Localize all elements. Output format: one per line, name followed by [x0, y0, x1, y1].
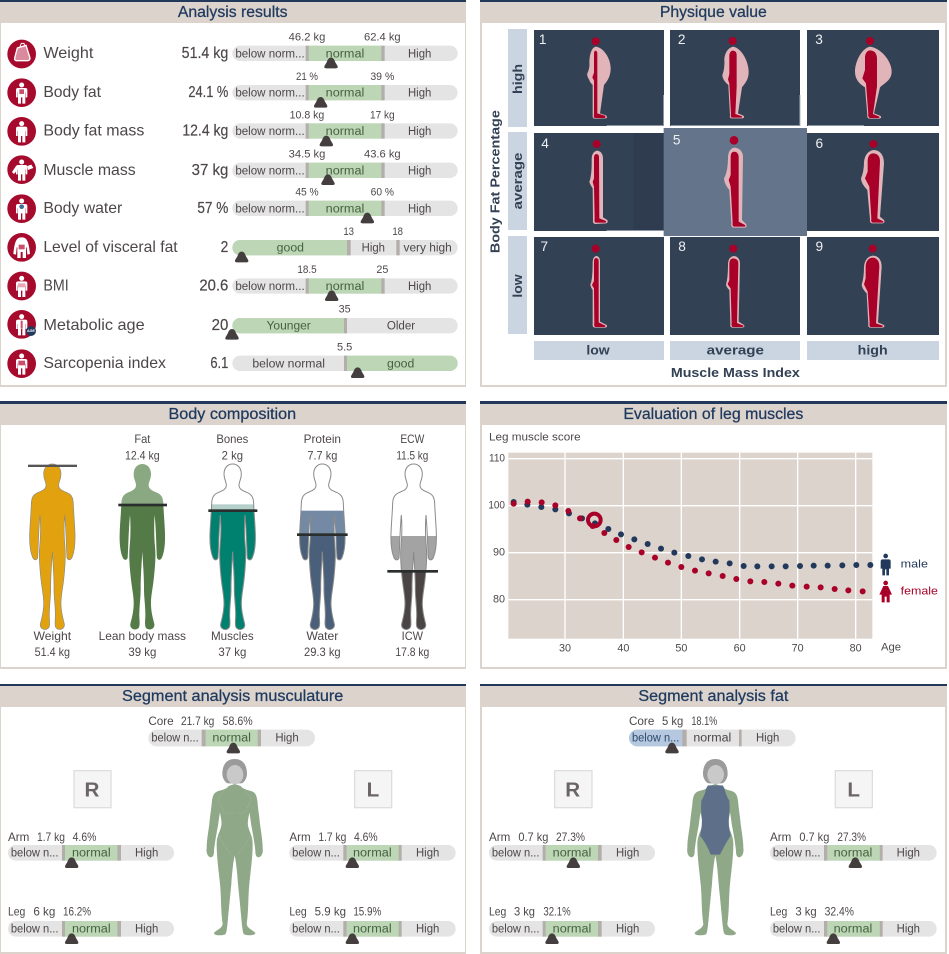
letter box: L: L	[847, 778, 860, 801]
scatter chart: 50	[675, 642, 687, 654]
bar: left leg: normal	[353, 922, 392, 936]
row: muscle mass: 37 kg	[192, 162, 228, 179]
row: sarcopenia index: 5.5	[337, 341, 352, 353]
bar: left leg: 3 kg	[795, 905, 817, 918]
cell 5 highlighted	[664, 128, 807, 236]
row: body fat mass: 17 kg	[370, 109, 395, 121]
row: bmi: BMI	[43, 277, 69, 294]
row: weight: High	[408, 46, 431, 60]
row: level of visceral fat	[7, 226, 458, 262]
figure: woman with core highlighted	[687, 759, 743, 935]
row label: high	[508, 29, 527, 127]
figure: weight	[28, 464, 77, 659]
figure: bones and muscles	[206, 433, 259, 659]
cell 4	[534, 133, 664, 231]
bar: core: High	[275, 730, 299, 744]
heading: segment analysis musculature: Segment analysis musculature	[122, 688, 343, 705]
bar: right arm: normal	[553, 846, 591, 860]
scatter chart: 40	[617, 642, 629, 654]
figure: ecw and icw: ICW	[402, 630, 423, 643]
bar: core: 58.6%	[223, 715, 253, 728]
figure: weight: 51.4 kg	[35, 646, 70, 659]
row: metabolic age	[7, 303, 458, 340]
row: body fat	[7, 71, 458, 108]
cell 5 highlighted: 5	[673, 132, 681, 147]
figure: ecw and icw	[387, 433, 440, 659]
bar: core: 21.7 kg	[181, 715, 214, 728]
bar: right arm: below n...	[11, 846, 58, 860]
row: muscle mass: below norm...	[235, 163, 305, 177]
bar: left leg: 32.4%	[825, 905, 854, 918]
row: sarcopenia index	[7, 341, 458, 378]
figure: ecw and icw: 17.8 kg	[395, 646, 429, 659]
row: level of visceral fat: very high	[403, 241, 452, 255]
row: body fat mass: High	[408, 124, 431, 138]
bar: left leg: Leg	[289, 905, 307, 918]
series: female	[511, 499, 866, 594]
letter box: L	[835, 771, 872, 808]
row: muscle mass: 43.6 kg	[364, 149, 401, 161]
row: sarcopenia index: below normal	[252, 356, 325, 370]
bar: right leg: 16.2%	[63, 905, 91, 918]
bar: right arm: 4.6%	[73, 831, 96, 844]
cell 9	[807, 237, 939, 335]
panel: physique value	[480, 0, 947, 387]
row: sarcopenia index: 6.1	[210, 355, 228, 372]
figure: protein and water: 7.7 kg	[307, 449, 337, 462]
figure: protein and water	[296, 433, 349, 659]
bar: left arm: High	[897, 846, 920, 860]
cell 3: 3	[815, 32, 823, 47]
bar: left leg	[289, 905, 456, 944]
bar: right leg: normal	[72, 922, 111, 936]
scatter chart: 70	[792, 642, 804, 654]
heading: segment analysis fat: Segment analysis fat	[638, 688, 789, 705]
row: body water: High	[408, 201, 431, 215]
cell 7	[534, 237, 664, 335]
legend: female	[879, 581, 938, 602]
scatter chart: 110	[489, 452, 505, 464]
cell 2	[670, 30, 800, 126]
heading: body composition: Body composition	[168, 406, 296, 423]
panel: body composition	[0, 401, 466, 669]
letter box: L: L	[367, 778, 379, 801]
bar: left arm	[770, 831, 937, 868]
row: muscle mass: normal	[326, 163, 364, 177]
row: weight: 51.4 kg	[182, 45, 228, 62]
cell 8	[670, 237, 800, 335]
bar: right arm: normal	[72, 846, 111, 860]
cell 1: 1	[539, 32, 546, 47]
row: bmi: below norm...	[235, 279, 305, 293]
bar: core: High	[756, 730, 779, 744]
row: metabolic age: Metabolic age	[43, 317, 145, 334]
column label: high	[807, 341, 939, 360]
row: sarcopenia index: good	[387, 356, 414, 370]
figure: protein and water: Water	[306, 630, 338, 643]
panel: segment analysis musculature	[0, 684, 466, 954]
cell 6	[807, 133, 939, 231]
bar: right leg: High	[616, 922, 639, 936]
figure: weight: Weight	[33, 630, 72, 643]
figure: protein and water: 29.3 kg	[304, 646, 341, 659]
figure: fat and lean body mass: Fat	[134, 433, 151, 446]
row: bmi: normal	[326, 279, 364, 293]
row: level of visceral fat: 13	[343, 226, 354, 238]
row: metabolic age: AGE	[27, 329, 36, 333]
cell 6: 6	[816, 136, 823, 151]
bar: right leg	[8, 905, 174, 944]
row: body fat mass: Body fat mass	[43, 122, 145, 139]
row label: low: low	[510, 274, 525, 298]
bar: right leg: High	[135, 922, 158, 936]
bar: left arm: 1.7 kg	[318, 831, 346, 844]
cell 4: 4	[541, 136, 549, 151]
row: bmi	[7, 264, 458, 301]
figure: fat and lean body mass: 12.4 kg	[125, 449, 160, 462]
bar: right leg: Leg	[8, 905, 25, 918]
row: body fat mass	[7, 109, 458, 146]
figure: bones and muscles: 37 kg	[218, 646, 246, 659]
panel: analysis results	[0, 0, 466, 387]
bar: left leg: Leg	[770, 905, 787, 918]
column label: high: high	[858, 342, 888, 357]
bar: left leg	[770, 905, 937, 944]
row: sarcopenia index: Sarcopenia index	[43, 355, 166, 372]
row: bmi: High	[408, 279, 431, 293]
row: muscle mass: Muscle mass	[43, 162, 136, 179]
row: body fat mass: 12.4 kg	[182, 122, 228, 139]
scatter chart: 80	[493, 593, 505, 605]
row: weight: 46.2 kg	[289, 32, 325, 44]
row: weight: below norm...	[235, 46, 305, 60]
scatter chart: 90	[493, 546, 505, 558]
cell 8: 8	[678, 239, 686, 254]
row: weight: 62.4 kg	[364, 32, 401, 44]
figure: bones and muscles: Muscles	[211, 630, 254, 643]
bar: left arm: below n...	[292, 846, 340, 860]
bar: left leg: normal	[834, 922, 872, 936]
bar: core: Core	[629, 715, 654, 728]
row: muscle mass: 34.5 kg	[289, 149, 325, 161]
bar: left arm: below n...	[773, 846, 820, 860]
row label: average: average	[510, 153, 525, 209]
figure: fat and lean body mass	[99, 433, 186, 659]
row: weight: normal	[326, 46, 364, 60]
bar: core: Core	[148, 715, 174, 728]
letter box: R: R	[85, 778, 100, 801]
heading: evaluation of leg muscles: Evaluation of leg muscles	[623, 406, 804, 423]
bar: right arm: 27.3%	[556, 831, 585, 844]
row: body water: Body water	[43, 200, 122, 217]
row: body fat: normal	[326, 86, 364, 100]
heading: physique value: Physique value	[660, 4, 767, 21]
bar: core: below n...	[151, 730, 199, 744]
bar: right arm: Arm	[489, 831, 510, 844]
row: body water: 60 %	[371, 187, 394, 199]
bar: left leg: below n...	[773, 922, 820, 936]
row: body fat: 24.1 %	[188, 84, 228, 101]
row: body water	[7, 187, 458, 223]
bar: right leg: Leg	[489, 905, 506, 918]
bar: left arm: 27.3%	[837, 831, 866, 844]
figure: fat and lean body mass: 39 kg	[128, 646, 156, 659]
row: weight: Weight	[43, 45, 94, 62]
scatter chart: 60	[734, 642, 746, 654]
panel: segment analysis fat	[480, 684, 947, 954]
cell 2: 2	[678, 32, 685, 47]
row: level of visceral fat: Level of visceral fat	[43, 239, 178, 256]
bar: core: 18.1%	[691, 715, 717, 728]
bar: left leg: 15.9%	[353, 905, 381, 918]
cell 1	[534, 30, 664, 126]
axis title: body fat percentage: Body Fat Percentage	[487, 110, 502, 253]
bar: right arm: 1.7 kg	[37, 831, 65, 844]
row: body fat: 21 %	[296, 71, 318, 83]
figure: fat and lean body mass: Lean body mass	[99, 630, 186, 643]
bar: right leg: below n...	[11, 922, 58, 936]
bar: left leg: 5.9 kg	[315, 905, 346, 918]
column label: average: average	[707, 342, 764, 357]
row: body fat mass: 10.8 kg	[290, 109, 324, 121]
heading: analysis results: Analysis results	[178, 4, 288, 21]
cell 9: 9	[816, 239, 823, 254]
row: metabolic age: Younger	[266, 319, 311, 333]
row: body fat mass: below norm...	[235, 124, 305, 138]
legend: male: male	[901, 558, 928, 570]
row: body water: below norm...	[235, 201, 305, 215]
bar: right arm: High	[616, 846, 639, 860]
highlight ring	[588, 514, 601, 526]
bar: left arm: Arm	[770, 831, 791, 844]
bar: right arm	[489, 831, 655, 868]
bar: right leg: 6 kg	[33, 905, 55, 918]
bar: right leg	[489, 905, 655, 944]
legend: male	[881, 554, 928, 575]
figure: bones and muscles: Bones	[216, 433, 248, 446]
bar: left arm	[289, 831, 456, 868]
row: bmi: 25	[376, 264, 388, 276]
bar: right leg: below n...	[492, 922, 539, 936]
column label: low	[534, 341, 664, 360]
bar: core: 5 kg	[662, 715, 683, 728]
row: level of visceral fat: 2	[221, 239, 228, 256]
row: metabolic age: Older	[387, 319, 415, 333]
row: body fat: below norm...	[235, 86, 305, 100]
row: bmi: 20.6	[199, 277, 228, 294]
bar: right leg: 3 kg	[514, 905, 535, 918]
row: weight	[7, 32, 458, 68]
bar: right arm: 0.7 kg	[518, 831, 548, 844]
column label: average	[670, 341, 800, 360]
bar: left arm: 4.6%	[354, 831, 378, 844]
row: muscle mass: High	[408, 163, 431, 177]
row label: high: high	[510, 64, 525, 94]
bar: left arm: High	[416, 846, 439, 860]
bar: left arm: normal	[353, 846, 392, 860]
bar: core	[148, 715, 315, 753]
bar: left arm: Arm	[289, 831, 311, 844]
figure: woman	[206, 759, 263, 935]
figure: protein and water: Protein	[304, 433, 341, 446]
figure: ecw and icw: ECW	[400, 433, 424, 446]
bar: left arm: normal	[834, 846, 872, 860]
figure: bones and muscles: 2 kg	[222, 449, 243, 462]
row: metabolic age: 35	[339, 303, 351, 315]
row: body fat mass: normal	[326, 124, 364, 138]
row: body water: 45 %	[295, 187, 319, 199]
bar: core: normal	[212, 730, 251, 744]
bar: right arm: High	[135, 846, 158, 860]
bar: core: below n...	[632, 730, 679, 744]
bar: core	[629, 715, 796, 753]
row: level of visceral fat: High	[362, 241, 385, 255]
letter box: R	[555, 771, 592, 808]
scatter chart: 30	[559, 642, 571, 654]
row label: low	[508, 236, 527, 334]
bar: left leg: below n...	[292, 922, 340, 936]
scatter chart: 100	[488, 499, 505, 511]
row label: average	[508, 132, 527, 230]
bar: left leg: High	[416, 922, 439, 936]
column label: low: low	[586, 342, 610, 357]
row: muscle mass	[7, 149, 458, 185]
bar: right leg: normal	[553, 922, 591, 936]
bar: left leg: High	[897, 922, 920, 936]
bar: right arm: Arm	[8, 831, 29, 844]
scatter chart	[488, 452, 901, 654]
axis title: leg muscle score: Leg muscle score	[489, 431, 581, 443]
bar: right arm: below n...	[492, 846, 539, 860]
row: bmi: 18.5	[297, 264, 317, 276]
scatter chart: 80	[850, 642, 862, 654]
bar: right leg: 32.1%	[543, 905, 571, 918]
row: level of visceral fat: good	[277, 241, 304, 255]
legend: female: female	[901, 585, 938, 597]
panel: evaluation of leg muscles	[480, 401, 947, 669]
cell 7: 7	[541, 239, 548, 254]
letter box: R: R	[565, 778, 580, 801]
row: body water: 57 %	[197, 200, 228, 217]
figure: ecw and icw: 11.5 kg	[396, 449, 428, 462]
row: body fat: 39 %	[370, 71, 394, 83]
bar: right arm	[8, 831, 174, 868]
letter box: L	[355, 771, 392, 808]
letter box: R	[74, 771, 111, 808]
bar: core: normal	[693, 730, 731, 744]
bar: left arm: 0.7 kg	[799, 831, 829, 844]
row: metabolic age: 20	[212, 317, 228, 334]
series: male	[511, 499, 873, 569]
cell 3	[807, 30, 939, 126]
row: body fat: High	[408, 86, 431, 100]
row: body water: normal	[326, 201, 364, 215]
row: body fat: Body fat	[43, 84, 102, 101]
scatter chart: Age	[881, 642, 901, 654]
axis title: muscle mass index: Muscle Mass Index	[671, 365, 800, 380]
row: level of visceral fat: 18	[392, 226, 403, 238]
